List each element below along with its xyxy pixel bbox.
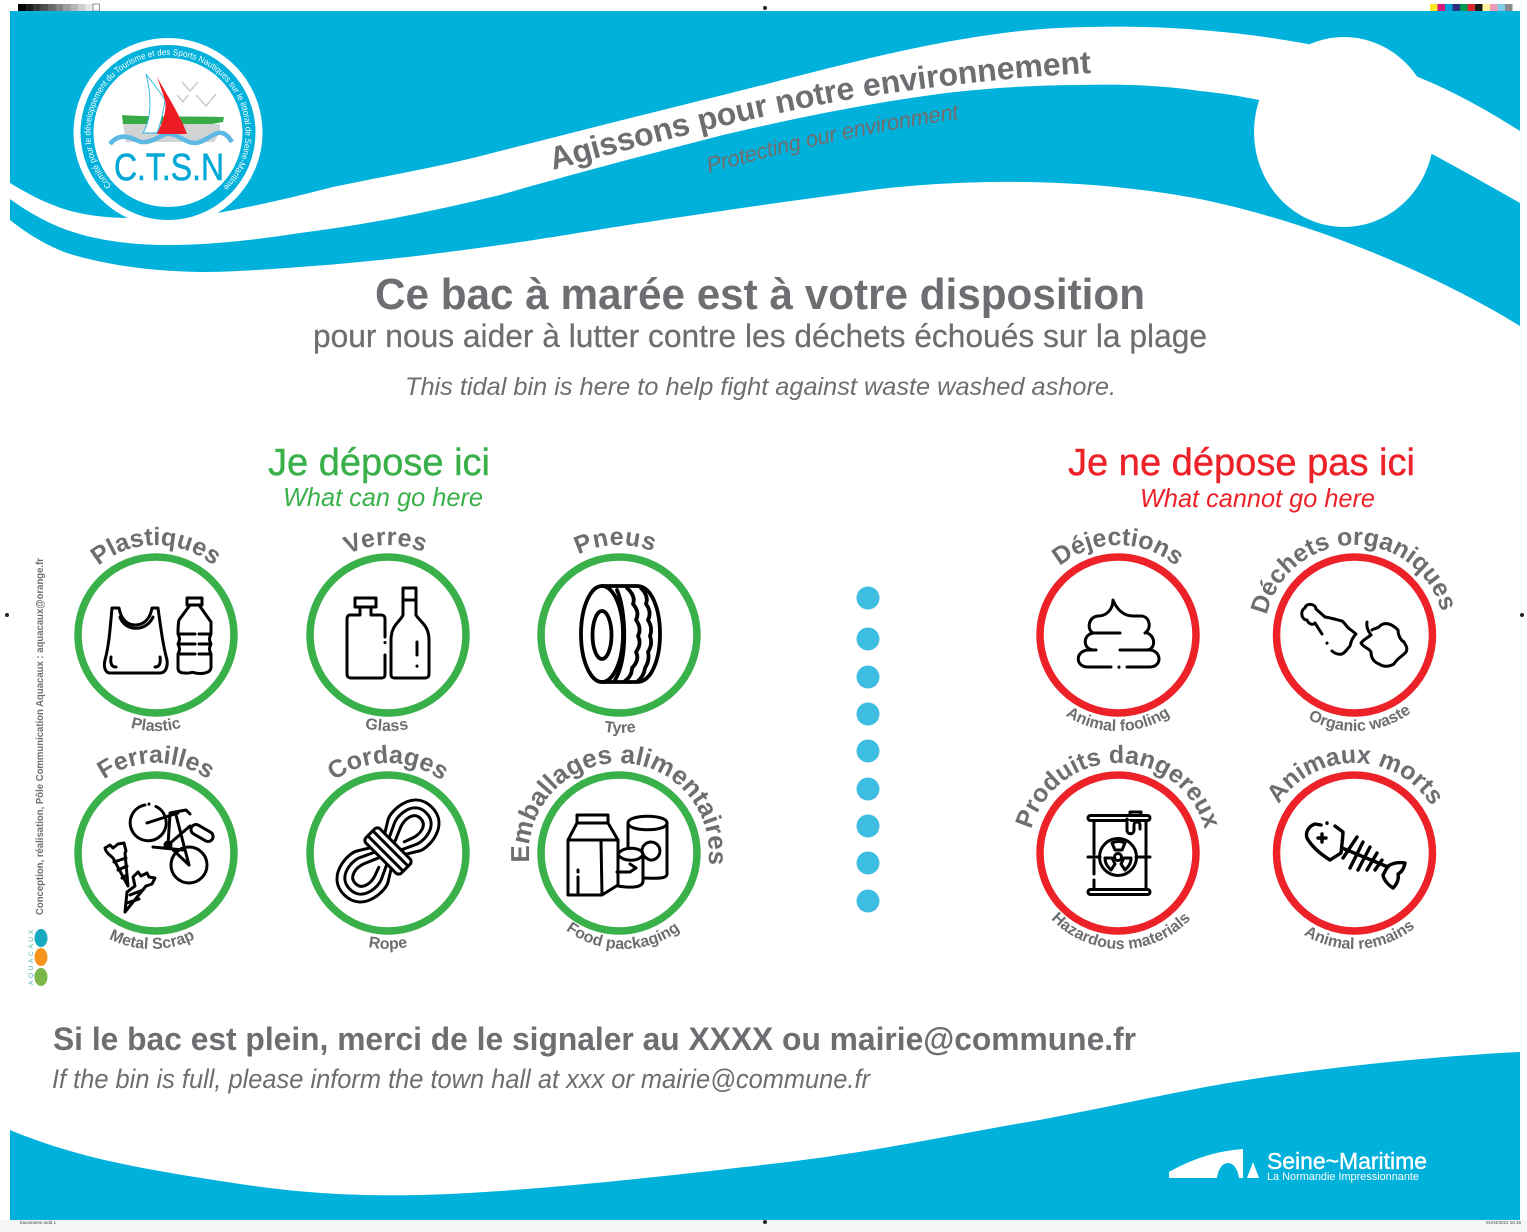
heading: accepted: Je dépose ici (268, 442, 490, 484)
card: metal scrap: Metal Scrap (110, 929, 194, 949)
card: animal remains (1269, 750, 1440, 949)
banner heading: Agissons pour notre environnement (554, 52, 1091, 170)
logo: C.T.S.N: C.T.S.N (114, 147, 224, 189)
icon: tyre (581, 586, 660, 682)
icon: rope coil (326, 789, 450, 913)
card: metal scrap: Ferrailles (96, 746, 212, 778)
icon: bicycle and screws (105, 804, 215, 912)
card: food packaging: Emballages alimentaires (511, 746, 723, 864)
card: animal fooling (1036, 528, 1200, 731)
card: tyre: Tyre (605, 720, 636, 736)
icon: radioactive barrel (1088, 812, 1150, 894)
contact notice: Si le bac est plein, merci de le signaler au XXXX ou mairie@commune.fr (53, 1021, 1136, 1057)
card: rope: Cordages (328, 744, 446, 779)
card: glass: Verres (342, 532, 426, 552)
card: organic waste: Organic waste (1310, 707, 1410, 732)
card: tyre (537, 532, 701, 736)
card: plastic: Plastiques (90, 526, 219, 564)
main title: Ce bac à marée est à votre disposition (375, 270, 1145, 319)
logo: Seine-Maritime: La Normandie Impressionnante (1267, 1171, 1419, 1183)
heading: refused (1068, 442, 1415, 513)
card: hazardous materials (1015, 744, 1218, 950)
icon: drumstick and apple (1302, 604, 1407, 666)
card: food packaging (511, 746, 723, 952)
card: plastic: Plastic (132, 717, 180, 732)
card: metal scrap (74, 746, 238, 949)
heading: accepted: What can go here (283, 482, 483, 512)
card: plastic (74, 526, 238, 732)
card: hazardous materials: Hazardous materials (1052, 912, 1190, 950)
printer marks and colour bars: bacamaree.indd 1 (20, 1220, 57, 1225)
card: tyre: Pneus (574, 532, 655, 554)
card: animal remains: Animal remains (1304, 922, 1414, 949)
logo: Seine-Maritime (1169, 1148, 1427, 1183)
card: hazardous materials: Produits dangereux (1015, 744, 1218, 830)
logo: Aquacaux: AQUACAUX (28, 929, 35, 985)
card: rope (306, 744, 470, 952)
card: glass: Glass (366, 718, 408, 732)
heading: refused: What cannot go here (1140, 483, 1375, 513)
card: glass (306, 532, 470, 732)
card: food packaging: Food packaging (566, 922, 680, 952)
card: animal fooling: Déjections (1051, 528, 1182, 565)
printer marks and colour bars: 01/04/2021 16:16 (1486, 1220, 1522, 1225)
icon: fish skeleton (1306, 823, 1405, 888)
card: organic waste: Déchets organiques (1250, 532, 1453, 614)
bottom blue wave (10, 1052, 1520, 1220)
icon: carton and cans (568, 815, 667, 895)
banner subheading: Protecting our environment (708, 105, 958, 173)
top blue wave banner (10, 11, 1520, 326)
divider dots (856, 586, 880, 912)
subtitle: pour nous aider à lutter contre les déchets échoués sur la plage (313, 318, 1207, 354)
heading: refused: Je ne dépose pas ici (1068, 442, 1415, 484)
icon: glass bottles (347, 588, 429, 678)
icon: bag and bottle (104, 598, 211, 673)
logo: C.T.S.N: Comité pour le développement du Tourisme et des Sports Nautiques sur le littoral de Seine-Maritime (84, 49, 252, 190)
card: organic waste (1250, 532, 1453, 732)
icon: droppings (1078, 600, 1159, 667)
card: animal remains: Animaux morts (1269, 750, 1440, 804)
credit text: Conception, réalisation, Pôle Communication Aquacaux : aquacaux@orange.fr (34, 558, 46, 915)
card: rope: Rope (369, 936, 407, 952)
english subtitle: This tidal bin is here to help fight against waste washed ashore. (405, 373, 1116, 401)
heading: accepted (268, 442, 490, 512)
logo: Seine-Maritime: Seine~Maritime (1267, 1148, 1427, 1174)
logo: Aquacaux (28, 929, 48, 986)
card: animal fooling: Animal fooling (1066, 708, 1170, 731)
english contact notice: If the bin is full, please inform the town hall at xxx or mairie@commune.fr (52, 1064, 871, 1094)
